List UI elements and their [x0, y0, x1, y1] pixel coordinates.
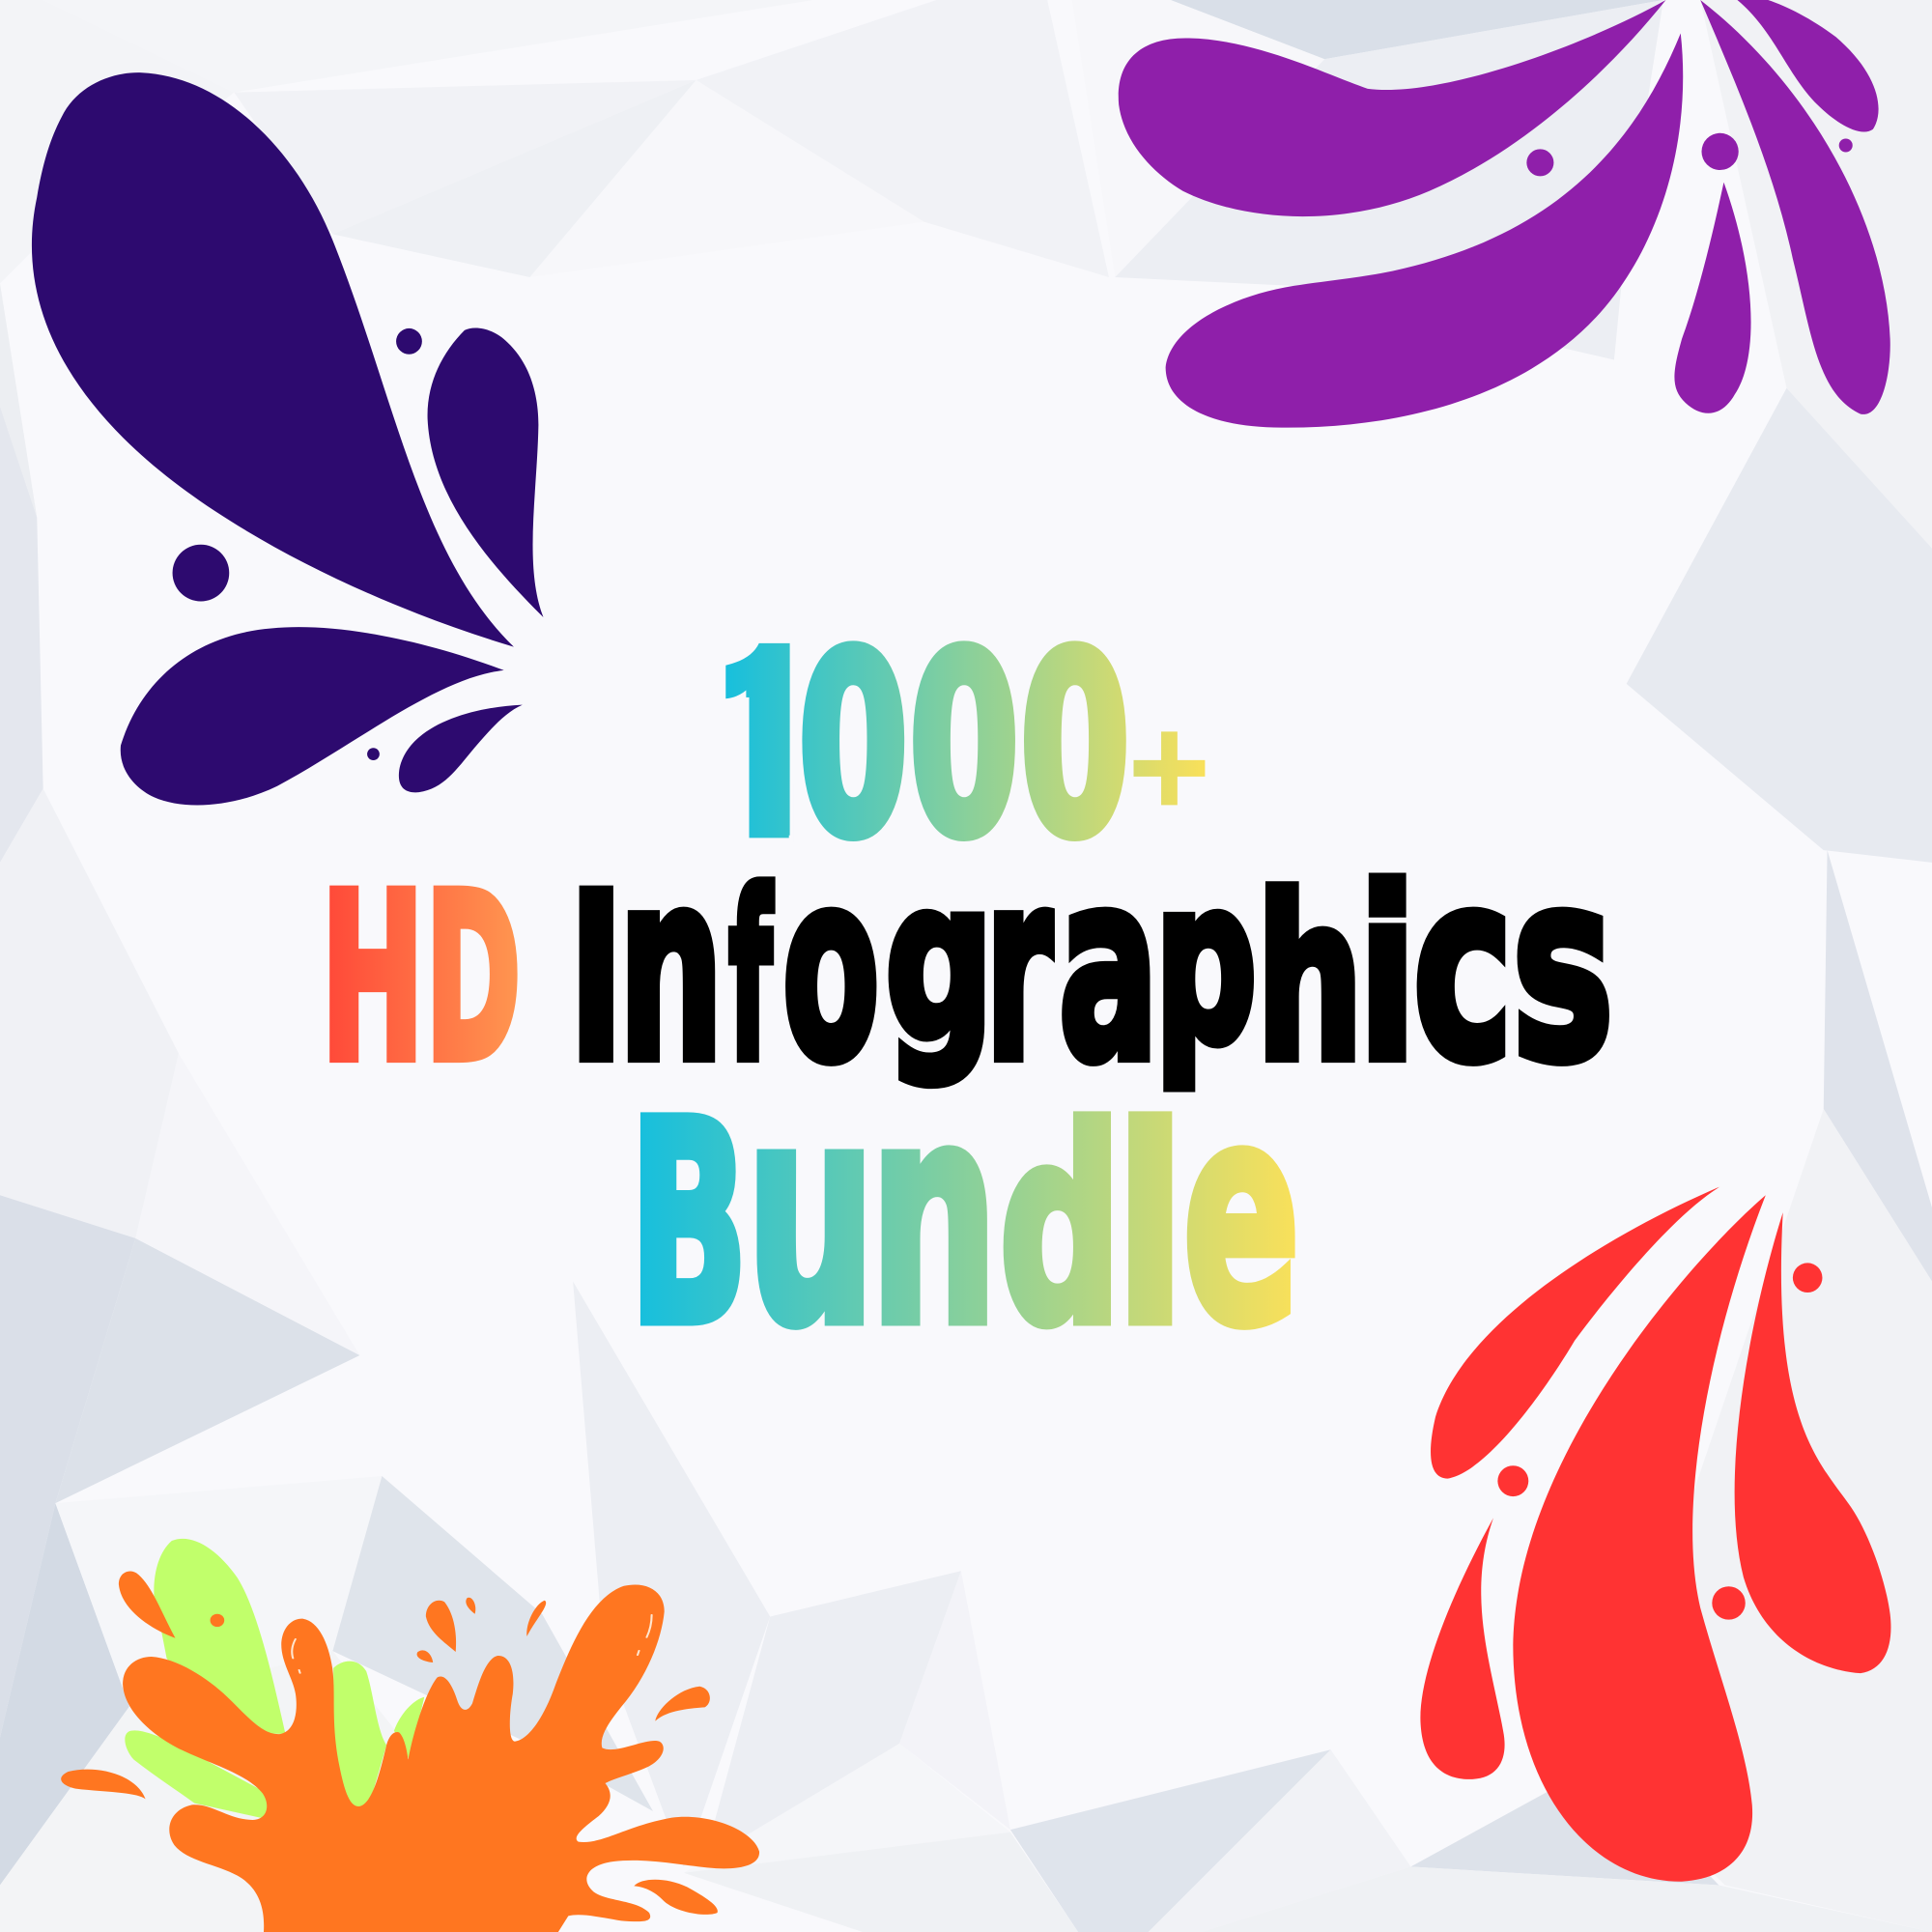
heading: 1000+: +: [1124, 701, 1214, 831]
heading: Bundle: n: [870, 1041, 998, 1391]
icon: purple splash top right: [1119, 0, 1890, 428]
label: Infographics: p: [1155, 833, 1257, 1094]
icon: orange and green paint splash bottom left: [61, 1539, 759, 1932]
label: Infographics: f: [728, 844, 773, 1112]
label: Infographics: o: [782, 817, 880, 1119]
label: Infographics: a: [1059, 817, 1158, 1119]
heading: 1000+: 0: [1020, 601, 1130, 891]
label: HD: H: [322, 845, 424, 1111]
label: Infographics: c: [1413, 817, 1513, 1119]
heading: Bundle: e: [1183, 1041, 1300, 1391]
heading: 1000+: [718, 601, 1214, 891]
heading: HD Infographics: [322, 817, 1614, 1119]
icon: navy splash top left: [32, 72, 544, 806]
numeral 1: footless stem accent: [720, 636, 793, 845]
label: Infographics: I: [570, 845, 623, 1111]
heading: Bundle: d: [1000, 1072, 1122, 1382]
heading: Bundle: l: [1117, 1072, 1184, 1382]
icon: red splash bottom right: [1420, 1186, 1890, 1882]
label: Infographics: s: [1512, 817, 1614, 1119]
heading: 1000+: 0: [799, 601, 908, 891]
label: Infographics: r: [985, 817, 1053, 1119]
label: Infographics: h: [1257, 849, 1363, 1110]
heading: 1000+: 0: [909, 601, 1019, 891]
heading: 1000+: 1: [718, 601, 794, 891]
label: HD: D: [426, 845, 521, 1111]
label: Infographics: n: [618, 817, 724, 1119]
label: Infographics: i: [1358, 839, 1416, 1113]
heading: Bundle: B: [630, 1065, 748, 1385]
heading: Bundle: u: [747, 1041, 875, 1391]
label: Infographics: g: [886, 835, 993, 1089]
